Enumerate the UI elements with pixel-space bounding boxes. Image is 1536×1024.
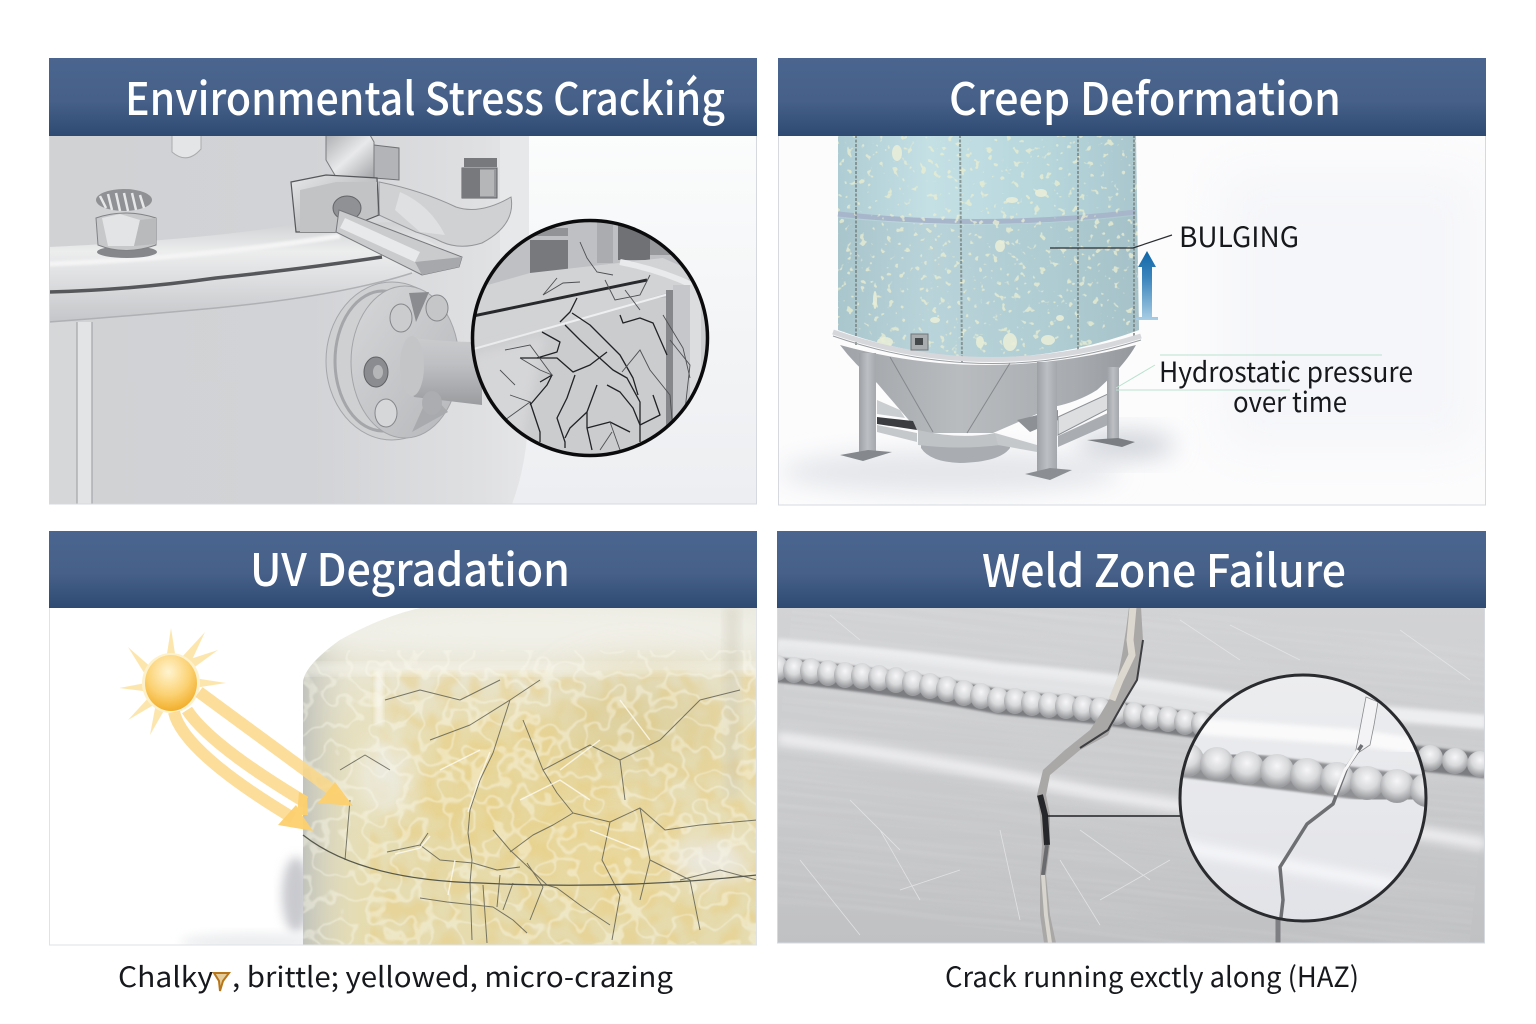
icon: left bolt bbox=[96, 189, 157, 258]
larger flakes bbox=[873, 145, 1064, 351]
panel border bbox=[50, 135, 756, 504]
rivet bbox=[172, 135, 201, 158]
icon: pipe flange bbox=[326, 282, 482, 440]
caption: UV symptoms: Chalky bbox=[118, 956, 213, 996]
rib bbox=[76, 322, 93, 504]
callout: bulging bbox=[1050, 216, 1299, 256]
callout: bulging: BULGING bbox=[1179, 216, 1299, 256]
callout: hydrostatic pressure over time bbox=[1116, 351, 1413, 421]
lower band bbox=[777, 738, 1486, 844]
crack continuation bbox=[1276, 918, 1280, 943]
seams bbox=[856, 135, 1134, 362]
icon: clamp bbox=[291, 135, 512, 275]
icon: upward blue arrow bbox=[1136, 251, 1158, 320]
panel: creep deformation bbox=[778, 58, 1486, 505]
hopper cone bbox=[840, 345, 1136, 433]
tank seam bbox=[303, 835, 757, 885]
weld bead bbox=[766, 655, 1493, 777]
heading: weld zone failure: Weld Zone Failure bbox=[982, 535, 1346, 600]
icon: UV rays bbox=[174, 692, 335, 818]
magnifier ring bbox=[472, 220, 708, 456]
callout: hydrostatic pressure over time: over time bbox=[1233, 381, 1347, 421]
heading bar bbox=[49, 531, 757, 608]
icon: ray arrowheads bbox=[278, 782, 353, 831]
icon: right bolt bbox=[462, 158, 497, 198]
icon: small amber mark bbox=[214, 973, 229, 991]
callout: hydrostatic pressure over time: Hydrostatic pressure bbox=[1159, 351, 1413, 391]
magnified rim bbox=[482, 258, 688, 298]
caption: weld symptom: Crack running exctly along (HAZ) bbox=[945, 956, 1359, 996]
photo: tank on hopper stand bbox=[778, 135, 1486, 505]
callout leader bbox=[1047, 815, 1182, 817]
panel border bbox=[778, 135, 1486, 505]
legs bbox=[859, 353, 876, 453]
heading bar bbox=[777, 531, 1486, 608]
bottom outlet bbox=[921, 445, 1010, 463]
crazing texture bbox=[303, 650, 757, 945]
photo: welded plate with crack bbox=[778, 608, 1484, 942]
caption: UV symptoms: , brittle; yellowed, micro-crazing bbox=[232, 956, 673, 996]
panel: environmental stress cracking bbox=[49, 58, 757, 504]
heading bar bbox=[49, 58, 757, 136]
photo: weathered tank bbox=[120, 608, 756, 944]
magnifier: crack along weld bbox=[1182, 676, 1424, 920]
heading: creep deformation: Creep Deformation bbox=[949, 63, 1341, 128]
heading: UV degradation: UV Degradation bbox=[250, 534, 570, 599]
upper band bbox=[777, 646, 1486, 722]
heading: environmental stress cracking: Environmental Stress Crackińg bbox=[125, 63, 725, 128]
specks bbox=[838, 135, 1138, 375]
magnifier ring bbox=[1180, 675, 1426, 921]
cross bracing bbox=[877, 425, 917, 442]
heading bar bbox=[778, 58, 1486, 136]
magnifier: surface cracks bbox=[470, 218, 710, 460]
panel: weld zone failure bbox=[761, 531, 1501, 996]
magnified nut bbox=[530, 240, 568, 273]
panel border bbox=[50, 607, 756, 945]
panel border bbox=[778, 607, 1484, 943]
main crack bbox=[1037, 607, 1143, 943]
photo: tank with flange and magnified cracks bbox=[49, 135, 757, 504]
icon: sun bbox=[119, 628, 226, 735]
scratches bbox=[800, 615, 1470, 935]
dark crazing bbox=[340, 680, 757, 943]
panel: UV degradation bbox=[49, 531, 790, 996]
flange rim bbox=[49, 222, 462, 322]
light crazing bbox=[395, 700, 650, 895]
